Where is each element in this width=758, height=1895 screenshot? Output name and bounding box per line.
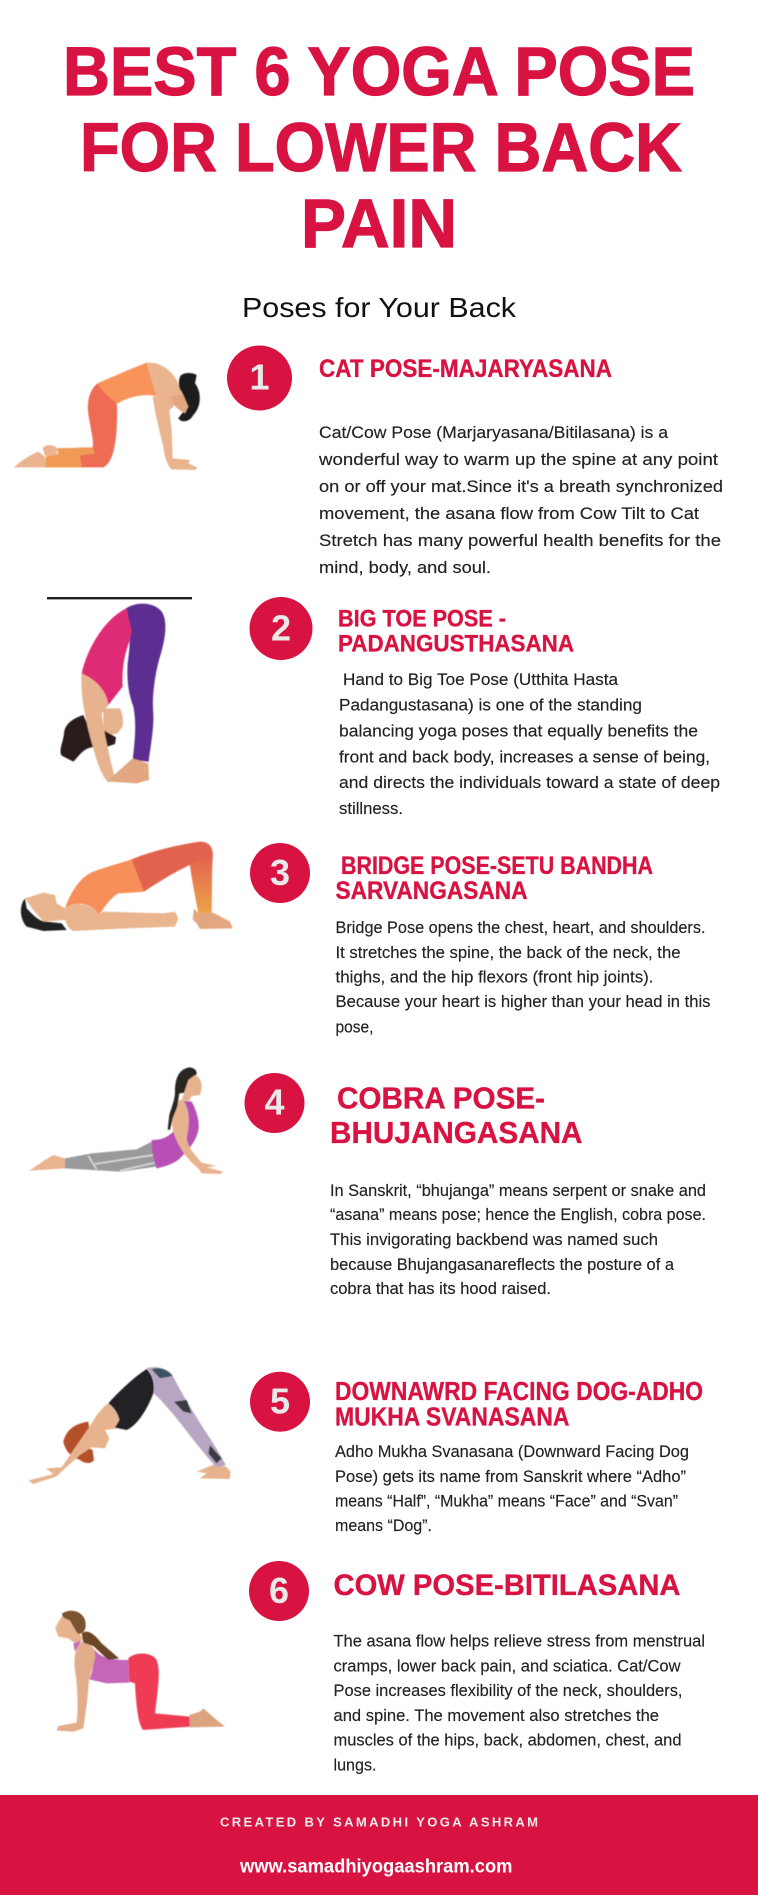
body text 5: Pose) gets its name from Sanskrit where “Adho” [335,1467,686,1486]
subtitle: Poses for Your Back [242,292,517,323]
heading 5: DOWNAWRD FACING DOG-ADHO [335,1378,703,1406]
number badge 5 [250,1372,310,1432]
body text 3 [336,918,710,1037]
number badge 6: 6 [269,1570,289,1611]
panel: pose 1 cat pose [14,346,723,577]
footer url: www.samadhiyogaashram.com [239,1857,512,1878]
illustration: cow pose [55,1611,225,1732]
heading 5: MUKHA SVANASANA [335,1404,570,1432]
body text 3: Because your heart is higher than your head in this [336,992,710,1011]
body text 5: means “Dog”. [335,1516,432,1535]
panel: pose 6 cow pose [55,1561,705,1775]
panel: pose 2 big toe pose [47,597,720,818]
body text 2: balancing yoga poses that equally benefits the [339,722,698,741]
heading 4: BHUJANGASANA [330,1115,582,1150]
number badge 4 [244,1073,304,1133]
heading 5 [335,1378,703,1432]
body text 6: and spine. The movement also stretches the [334,1706,659,1725]
body text 6: cramps, lower back pain, and sciatica. Cat/Cow [334,1657,681,1676]
body text 3: It stretches the spine, the back of the neck, the [336,943,680,962]
body text 3: thighs, and the hip flexors (front hip joints). [336,968,654,987]
body text 1 [318,423,723,577]
body text 3: pose, [336,1018,374,1037]
illustration: cat pose [14,363,200,470]
body text 2: and directs the individuals toward a state of deep [339,773,720,792]
body text 6: lungs. [334,1756,376,1775]
body text 3: Bridge Pose opens the chest, heart, and shoulders. [336,918,706,937]
number badge 3: 3 [270,852,290,893]
number badge 1 [227,346,292,410]
number badge 1: 1 [249,356,270,398]
heading 1: CAT POSE-MAJARYASANA [319,355,612,383]
body text 5: Adho Mukha Svanasana (Downward Facing Dog [335,1442,689,1461]
title: BEST 6 YOGA POSE [63,33,695,110]
body text 2: Padangustasana) is one of the standing [339,696,642,715]
illustration: cobra pose [29,1067,223,1174]
heading 6: COW POSE-BITILASANA [334,1569,680,1602]
body text 2: Hand to Big Toe Pose (Utthita Hasta [343,670,619,689]
footer band [0,1795,758,1895]
illustration: bridge pose [21,842,233,931]
panel: pose 3 bridge pose [21,842,711,1037]
illustration: big toe pose [47,597,192,783]
heading 2: PADANGUSTHASANA [338,631,574,658]
heading 2 [338,606,574,658]
number badge 4: 4 [264,1082,285,1122]
body text 2 [339,670,720,818]
footer credit: CREATED BY SAMADHI YOGA ASHRAM [220,1815,538,1830]
title: FOR LOWER BACK [80,109,682,186]
body text 1: on or off your mat.Since it's a breath synchronized [319,477,723,496]
body text 4: “asana” means pose; hence the English, cobra pose. [330,1205,706,1224]
number badge 5: 5 [270,1380,290,1422]
body text 4: cobra that has its hood raised. [330,1279,551,1298]
number badge 2 [250,597,312,660]
title [63,33,695,262]
heading 2: BIG TOE POSE - [338,606,506,633]
body text 1: mind, body, and soul. [319,558,491,577]
body text 2: stillness. [339,799,403,818]
number badge 3 [250,843,310,903]
heading 3: BRIDGE POSE-SETU BANDHA [341,852,653,880]
body text 4 [330,1181,706,1298]
body text 1: movement, the asana flow from Cow Tilt to Cat [319,504,699,523]
title: PAIN [301,185,457,262]
heading 3 [336,852,653,905]
body text 2: front and back body, increases a sense of being, [339,748,710,767]
body text 6: The asana flow helps relieve stress from menstrual [334,1632,705,1651]
body text 1: Stretch has many powerful health benefits for the [319,531,721,550]
body text 6 [334,1632,705,1775]
panel: pose 5 downward facing dog [28,1367,703,1535]
body text 4: because Bhujangasanareflects the posture of a [330,1255,675,1274]
body text 5: means “Half”, “Mukha” means “Face” and “Svan” [335,1492,678,1511]
illustration: downward facing dog [28,1367,231,1484]
heading 3: SARVANGASANA [336,877,528,905]
heading 4: COBRA POSE- [337,1081,545,1116]
body text 4: This invigorating backbend was named such [330,1230,658,1249]
body text 1: Cat/Cow Pose (Marjaryasana/Bitilasana) is a [319,423,669,442]
heading 4 [330,1081,582,1150]
body text 6: muscles of the hips, back, abdomen, chest, and [334,1731,682,1750]
body text 4: In Sanskrit, “bhujanga” means serpent or snake and [330,1181,706,1200]
body text 1: wonderful way to warm up the spine at any point [318,450,718,469]
number badge 2: 2 [271,608,291,648]
body text 6: Pose increases flexibility of the neck, shoulders, [334,1681,682,1700]
body text 5 [335,1442,689,1535]
panel: pose 4 cobra pose [29,1067,706,1298]
number badge 6 [249,1561,309,1621]
